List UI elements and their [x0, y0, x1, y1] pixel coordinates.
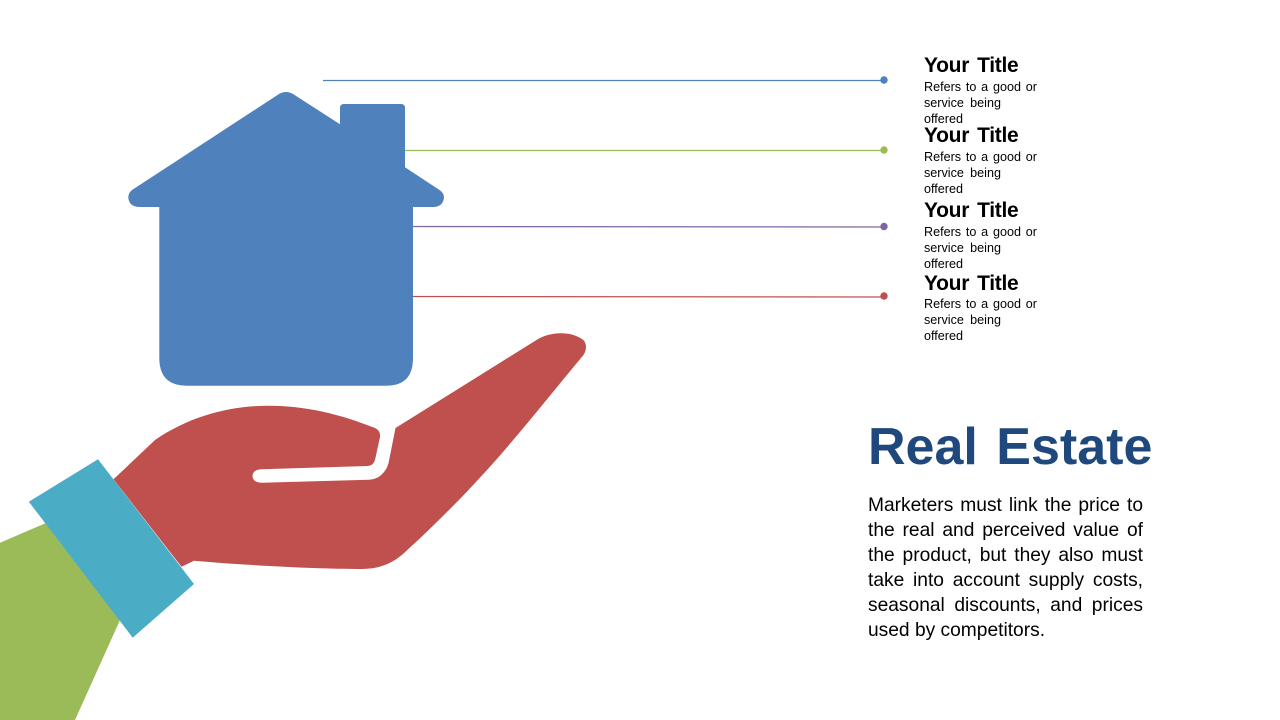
heading: Real Estate: Real Estate	[868, 418, 1152, 476]
item 4 description: service being	[924, 313, 1001, 327]
item 1 title: Your Title	[924, 54, 1018, 77]
item 3 title: Your Title	[924, 199, 1018, 222]
callout: item 1	[924, 54, 1037, 126]
text block: description paragraph: take into account supply costs,	[868, 570, 1143, 591]
callout: item 4	[924, 272, 1037, 343]
text block: description paragraph: Marketers must link the price to	[868, 495, 1143, 516]
item 2 description: offered	[924, 182, 963, 196]
item 1 description	[924, 80, 1037, 126]
item 1 description: offered	[924, 112, 963, 126]
item 2 description: service being	[924, 166, 1001, 180]
item 3 description	[924, 224, 1037, 270]
text block: description paragraph: the product, but they also must	[868, 545, 1143, 566]
text block: description paragraph: used by competitors.	[868, 620, 1045, 641]
item 1 description: service being	[924, 96, 1001, 110]
icon: red open hand	[114, 333, 586, 569]
callout: item 2	[924, 124, 1037, 196]
leader line: blue	[323, 76, 888, 84]
leader line: purple	[410, 223, 888, 230]
callout: item 3	[924, 199, 1037, 270]
item 3 description: Refers to a good or	[924, 224, 1037, 238]
leader line: green	[400, 146, 888, 154]
item 4 description: Refers to a good or	[924, 297, 1037, 311]
leader line: red	[410, 292, 888, 300]
text block: description paragraph: the real and perceived value of	[868, 520, 1143, 541]
item 1 description: Refers to a good or	[924, 80, 1037, 94]
icon: house	[128, 92, 444, 386]
icon: green sleeve	[0, 523, 120, 720]
text block: description paragraph	[868, 495, 1143, 641]
item 4 description: offered	[924, 329, 963, 343]
item 3 description: service being	[924, 240, 1001, 254]
text block: description paragraph: seasonal discounts, and prices	[868, 595, 1143, 616]
item 4 title: Your Title	[924, 272, 1018, 294]
item 4 description	[924, 297, 1037, 343]
icon: teal cuff	[29, 459, 194, 638]
item 2 title: Your Title	[924, 124, 1018, 147]
item 2 description: Refers to a good or	[924, 150, 1037, 164]
item 3 description: offered	[924, 256, 963, 270]
item 2 description	[924, 150, 1037, 196]
